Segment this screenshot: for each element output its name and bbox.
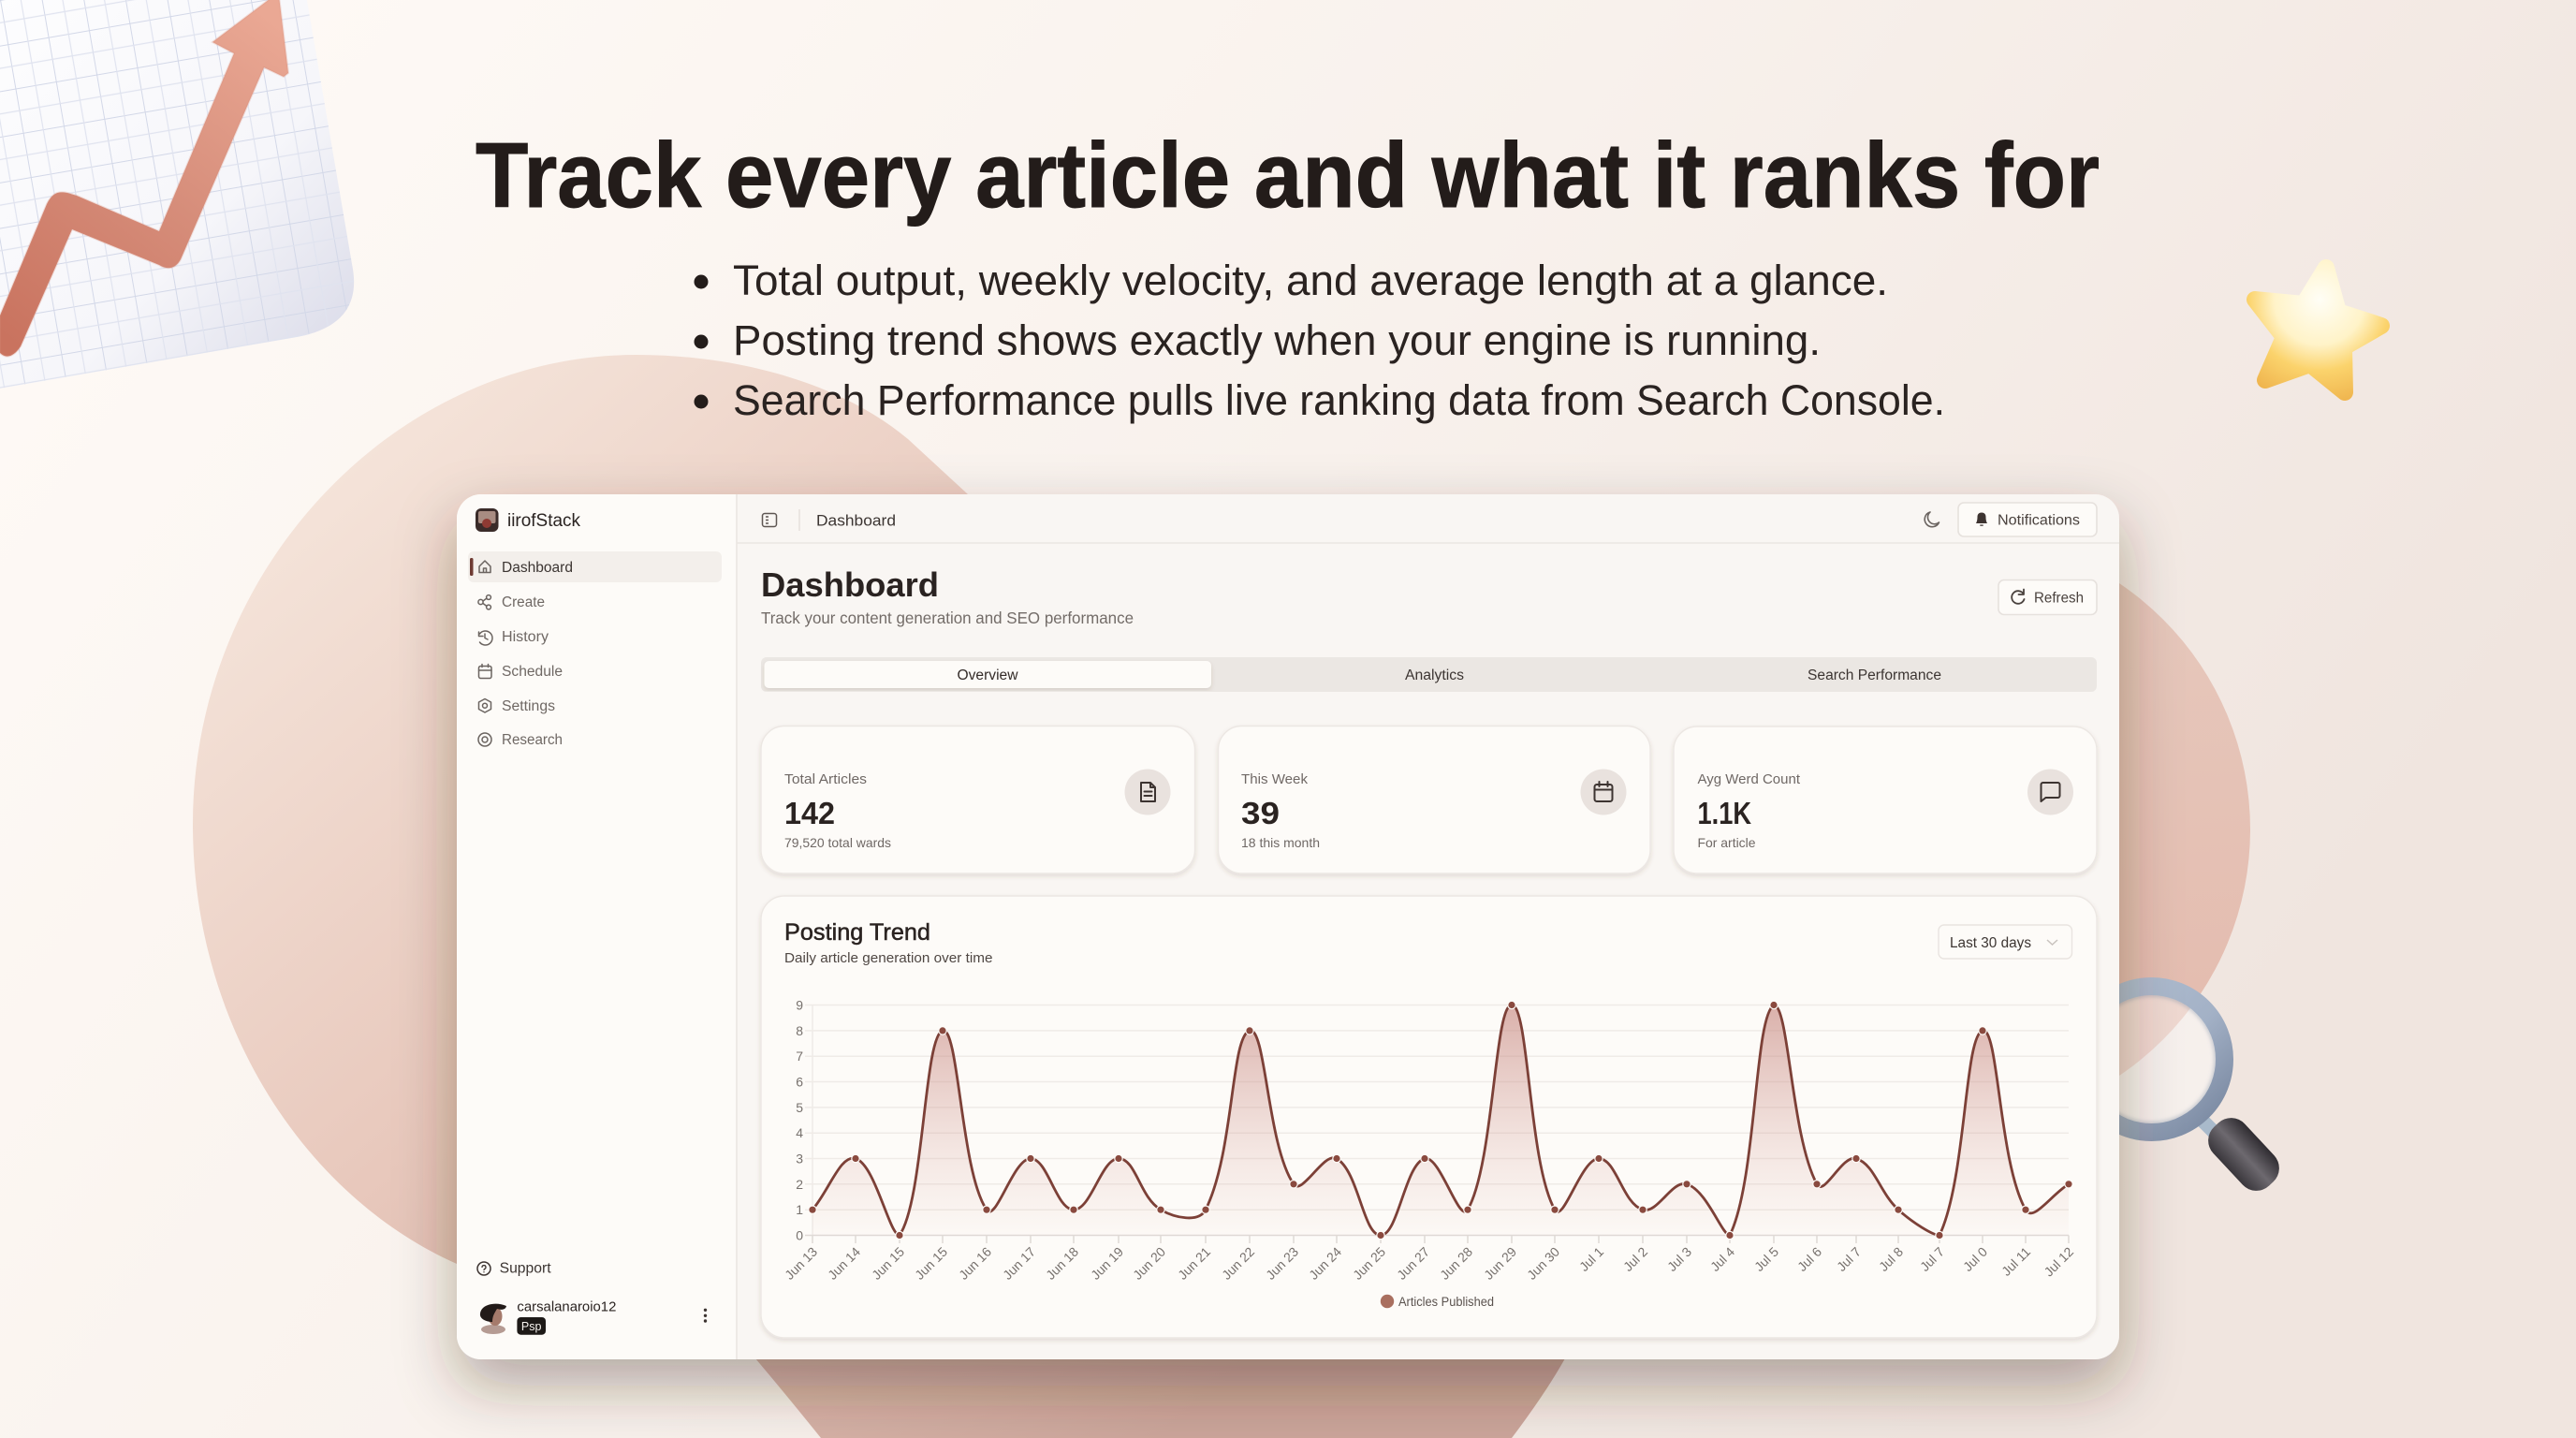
chart title: Posting Trend (784, 919, 930, 946)
date range select: Last 30 days (1950, 935, 2031, 951)
logo (476, 508, 498, 532)
x axis labels: Jun 14 (825, 1244, 863, 1283)
x axis labels: Jun 18 (1043, 1244, 1081, 1283)
bullet list (695, 257, 1945, 424)
panel: posting trend chart card (761, 896, 2097, 1338)
nav item: Dashboard (active) (468, 551, 722, 582)
stat card: This Week (1219, 726, 1650, 873)
area fill and trend line (812, 1005, 2069, 1236)
grid lines (805, 1005, 2069, 1236)
nav item: Research: Research (502, 732, 563, 748)
breadcrumb: Dashboard (816, 511, 896, 530)
bullet 2: Posting trend shows exactly when your engine is running. (733, 316, 1821, 364)
dashboard window (457, 494, 2119, 1359)
tab: Overview (active) (764, 661, 1211, 688)
y axis labels: 5 (796, 1100, 803, 1115)
x axis labels: Jul 2 (1620, 1244, 1650, 1274)
bullet 3: Search Performance pulls live ranking data from Search Console. (733, 376, 1945, 424)
stat card: This Week: 18 this month (1241, 835, 1320, 850)
x axis labels: Jun 30 (1524, 1244, 1562, 1283)
y axis labels: 6 (796, 1075, 803, 1090)
tab: Overview (active): Overview (957, 668, 1018, 683)
tabs bar (761, 657, 2097, 692)
panel: top bar (737, 503, 2119, 543)
panel: sidebar (457, 494, 737, 1359)
x axis labels: Jul 3 (1664, 1244, 1694, 1274)
nav item: History: History (502, 629, 549, 645)
x axis labels: Jun 28 (1437, 1244, 1475, 1283)
icon: speech bubble (2027, 770, 2073, 814)
x axis labels: Jul 12 (2041, 1244, 2076, 1280)
stat card: Total Articles (761, 726, 1194, 873)
nav item: History (479, 629, 549, 645)
y axis labels: 0 (796, 1228, 803, 1243)
bullet 1: Total output, weekly velocity, and average length at a glance. (733, 257, 1888, 304)
x axis labels: Jun 16 (956, 1244, 994, 1283)
nav item: Schedule: Schedule (502, 664, 563, 680)
username: carsalanaroio12 (517, 1299, 616, 1315)
x axis labels: Jun 29 (1481, 1244, 1519, 1283)
stat card: Avg Word Count (1674, 726, 2097, 873)
x axis labels: Jun 22 (1219, 1244, 1257, 1283)
icon: calendar (1580, 770, 1627, 814)
tab: Search Performance: Search Performance (1808, 668, 1941, 683)
plan badge: Psp (521, 1320, 542, 1333)
icon: more menu (704, 1309, 707, 1323)
stat card: This Week: This Week (1241, 771, 1309, 787)
nav item: Create (478, 594, 545, 610)
stat card: Total Articles: Total Articles (784, 771, 867, 787)
page subtitle: Track your content generation and SEO performance (761, 609, 1134, 627)
y axis labels: 4 (796, 1125, 803, 1140)
x axis labels: Jun 15 (869, 1244, 907, 1283)
y axis labels: 7 (796, 1049, 803, 1064)
x axis labels: Jul 1 (1576, 1244, 1606, 1274)
page heading: Dashboard (761, 565, 939, 604)
notifications button (1958, 503, 2097, 536)
stat card: Total Articles: 142 (784, 796, 835, 830)
y axis labels: 2 (796, 1177, 803, 1192)
stat card: This Week: 39 (1241, 796, 1280, 830)
y axis labels: 9 (796, 998, 803, 1013)
support link (477, 1260, 551, 1277)
user avatar (480, 1304, 506, 1334)
nav item: Settings (479, 698, 555, 714)
date range select (1939, 925, 2072, 959)
x axis labels: Jul 0 (1960, 1244, 1990, 1274)
title: Track every article and what it ranks for (476, 124, 2100, 227)
refresh button: Refresh (2034, 590, 2084, 606)
x axis labels: Jun 20 (1130, 1244, 1168, 1283)
icon: sidebar toggle (762, 509, 799, 531)
data points (809, 1001, 2072, 1240)
notifications button: Notifications (1998, 513, 2080, 529)
x axis labels: Jul 5 (1751, 1244, 1781, 1274)
x axis labels: Jun 13 (782, 1244, 820, 1283)
x axis labels: Jul 4 (1707, 1244, 1737, 1274)
icon: magnifying glass (2078, 987, 2287, 1198)
x axis labels: Jul 7 (1834, 1244, 1864, 1274)
y axis labels (796, 998, 803, 1243)
x axis labels: Jun 23 (1263, 1244, 1301, 1283)
nav item: Dashboard (active): Dashboard (502, 560, 573, 576)
x axis labels (782, 1244, 2076, 1283)
stat card: Avg Word Count: Ayg Werd Count (1698, 771, 1801, 787)
brand name: iirofStack (507, 511, 580, 531)
chart subtitle: Daily article generation over time (784, 950, 992, 966)
icon: growth chart sticker (0, 0, 354, 389)
refresh button (1998, 580, 2097, 614)
x axis labels: Jul 6 (1794, 1244, 1824, 1274)
x axis labels: Jun 24 (1306, 1244, 1344, 1283)
x axis labels: Jun 17 (1000, 1244, 1038, 1283)
x axis labels: Jun 25 (1350, 1244, 1388, 1283)
chart legend: Articles Published (1398, 1295, 1494, 1309)
nav item: Settings: Settings (502, 698, 555, 714)
x axis labels: Jun 19 (1088, 1244, 1126, 1283)
background blob: left and bottom lobe (193, 355, 1591, 1438)
background blob: right lobe (1657, 533, 2250, 1126)
x axis labels: Jun 21 (1175, 1244, 1213, 1283)
plan badge (517, 1317, 546, 1335)
x axis labels: Jul 11 (1998, 1244, 2033, 1279)
x axis labels: Jul 7 (1917, 1244, 1947, 1274)
support link: Support (500, 1260, 551, 1277)
stat card: Total Articles: 79,520 total wards (784, 835, 891, 850)
icon: document (1125, 770, 1170, 814)
stat card: Avg Word Count: 1.1K (1698, 796, 1751, 830)
icon: star (2255, 268, 2381, 392)
y axis labels: 3 (796, 1152, 803, 1167)
x axis labels: Jun 15 (912, 1244, 950, 1283)
x axis labels: Jun 27 (1394, 1244, 1432, 1283)
x axis labels: Jul 8 (1876, 1244, 1906, 1274)
stat card: Avg Word Count: For article (1698, 835, 1756, 850)
tab: Analytics: Analytics (1405, 668, 1464, 683)
line chart (782, 998, 2076, 1309)
y axis labels: 1 (796, 1202, 803, 1217)
icon: moon (1925, 512, 1939, 527)
y axis labels: 8 (796, 1023, 803, 1038)
nav item: Create: Create (502, 594, 545, 610)
